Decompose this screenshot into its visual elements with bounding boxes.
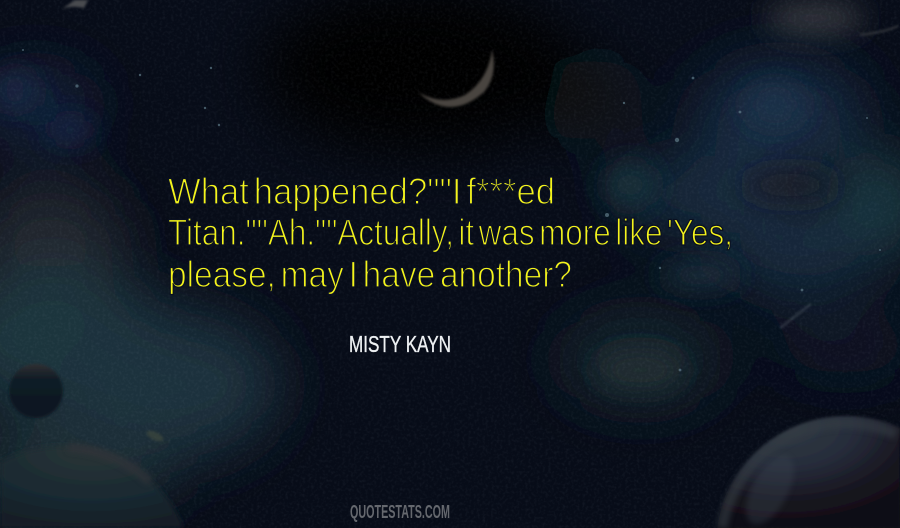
quote text: please, may I have another?: [168, 254, 572, 295]
stars: [22, 49, 881, 371]
moon crescent: [418, 50, 494, 107]
small galaxy: [145, 429, 165, 443]
quote text: What happened?""I f***ed: [168, 171, 555, 212]
right planet: [717, 416, 900, 528]
top left fragment planet: [62, 0, 88, 9]
comet streak: [780, 304, 811, 328]
quote text: [168, 171, 733, 295]
nebula wisps: [0, 2, 865, 388]
quote text: Titan.""Ah.""Actually, it was more like 'Yes,: [168, 212, 733, 253]
left large planet: [0, 446, 184, 528]
author name: MISTY KAYN: [349, 331, 451, 357]
source watermark: QUOTESTATS.COM: [350, 502, 450, 522]
left small planet: [9, 364, 63, 418]
top right nebula arc: [860, 26, 898, 35]
